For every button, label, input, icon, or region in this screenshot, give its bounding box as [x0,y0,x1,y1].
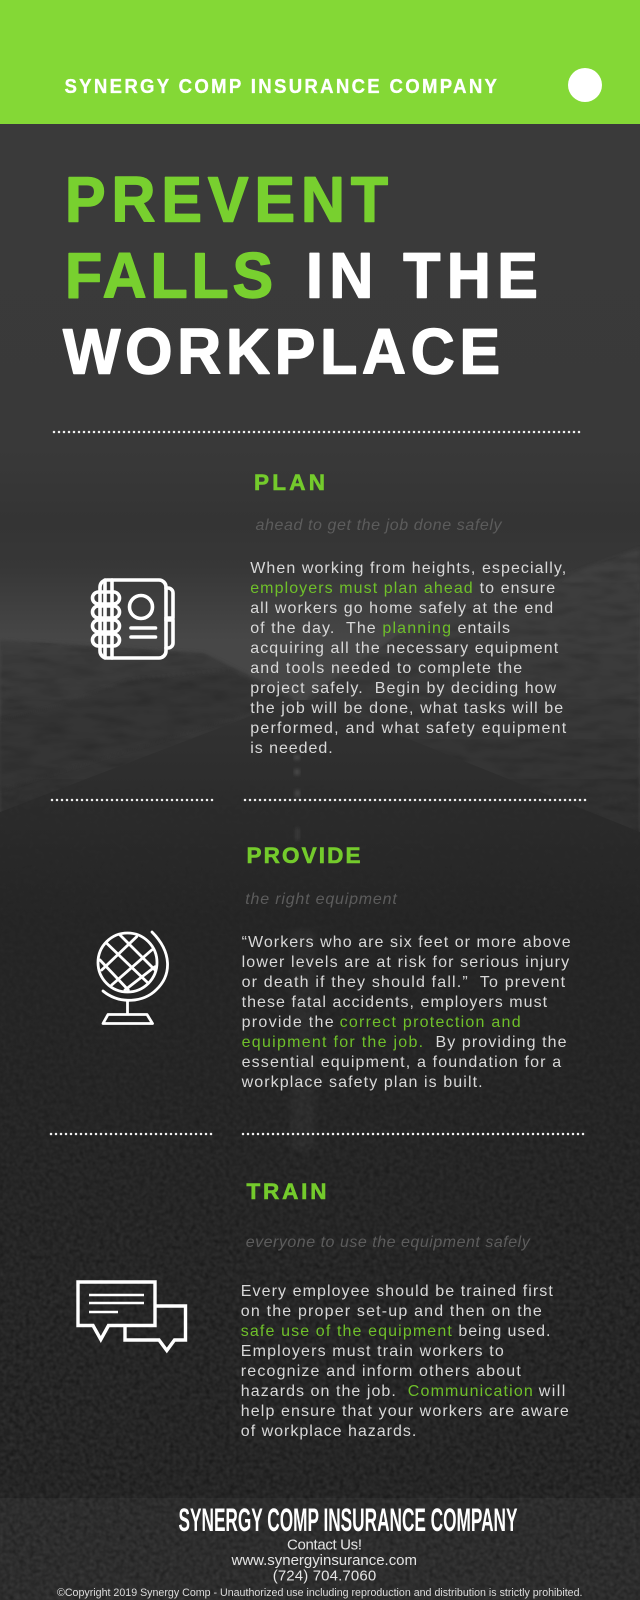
body text: plan: acquiring all the necessary equipment [250,640,559,657]
icon: notebook [92,580,173,658]
header company name: SYNERGY COMP INSURANCE COMPANY [64,76,497,98]
body text: train: of workplace hazards. [241,1423,416,1440]
header band [0,0,640,124]
body text: train: Employers must train workers to [241,1343,504,1360]
body text: plan: When working from heights, especially, [250,560,566,577]
icon: globe [98,932,168,1024]
body text: plan [250,560,567,757]
body text: plan: of the day. The [250,620,376,637]
body text: train: Communication [408,1383,533,1400]
copyright: ©Copyright 2019 Synergy Comp - Unauthorized use including reproduction and distribution is strictly prohibited. [57,1587,582,1599]
header white circle [568,68,602,102]
divider row 3 [51,1133,585,1135]
section: provide [98,843,571,1091]
section: plan [92,470,567,757]
title: IN THE [306,240,538,312]
body text: provide: equipment for the job. [242,1034,423,1051]
body text: provide: “Workers who are six feet or more above [242,934,571,951]
body text: plan: the job will be done, what tasks will be [250,700,563,717]
body text: provide: By providing the [436,1034,567,1051]
body text: train: Every employee should be trained first [241,1283,553,1300]
body text: train: recognize and inform others about [241,1363,521,1380]
body text: train: being used. [458,1323,550,1340]
subheading: train: everyone to use the equipment safely [246,1234,531,1251]
body text: plan: project safely. Begin by deciding how [250,680,557,697]
title [63,164,538,388]
title: WORKPLACE [63,316,500,388]
body text: provide: or death if they should fall.” To prevent [242,974,566,991]
body text: provide: lower levels are at risk for serious injury [242,954,569,971]
body text: train [241,1283,569,1440]
subheading: plan: ahead to get the job done safely [256,517,502,534]
body text: plan: performed, and what safety equipment [250,720,567,737]
body text: plan: entails [458,620,510,637]
body text: plan: is needed. [250,740,333,757]
body text: train: on the proper set-up and then on the [241,1303,542,1320]
body text: train: hazards on the job. [241,1383,396,1400]
body text: provide [241,934,571,1091]
phone: (724) 704.7060 [273,1568,376,1584]
subheading: provide: the right equipment [245,891,397,908]
body text: train: help ensure that your workers are aware [241,1403,569,1420]
title: FALLS [65,240,273,312]
body text: plan: all workers go home safely at the end [250,600,553,617]
body text: plan: and tools needed to complete the [250,660,522,677]
body text: train: will [538,1383,565,1400]
body text: train: safe use of the equipment [241,1323,452,1340]
contact heading: Contact Us! [287,1536,362,1554]
website: www.synergyinsurance.com [230,1552,417,1569]
section: train [78,1179,569,1440]
icon: chat bubbles [78,1282,186,1350]
body text: plan: to ensure [480,580,555,597]
heading: provide: PROVIDE [246,843,360,868]
body text: provide: workplace safety plan is built. [241,1074,483,1091]
title: PREVENT [65,164,388,236]
body text: provide: essential equipment, a foundation for a [242,1054,561,1071]
footer band [0,1498,640,1600]
body text: plan: employers must plan ahead [250,580,473,597]
body text: provide: provide the [242,1014,334,1031]
body text: provide: correct protection and [340,1014,521,1031]
body text: plan: planning [382,620,451,637]
heading: plan: PLAN [254,470,325,495]
heading: train: TRAIN [246,1179,326,1204]
body text: provide: these fatal accidents, employers must [242,994,548,1011]
divider row 2 [52,799,587,801]
divider top [54,431,583,433]
